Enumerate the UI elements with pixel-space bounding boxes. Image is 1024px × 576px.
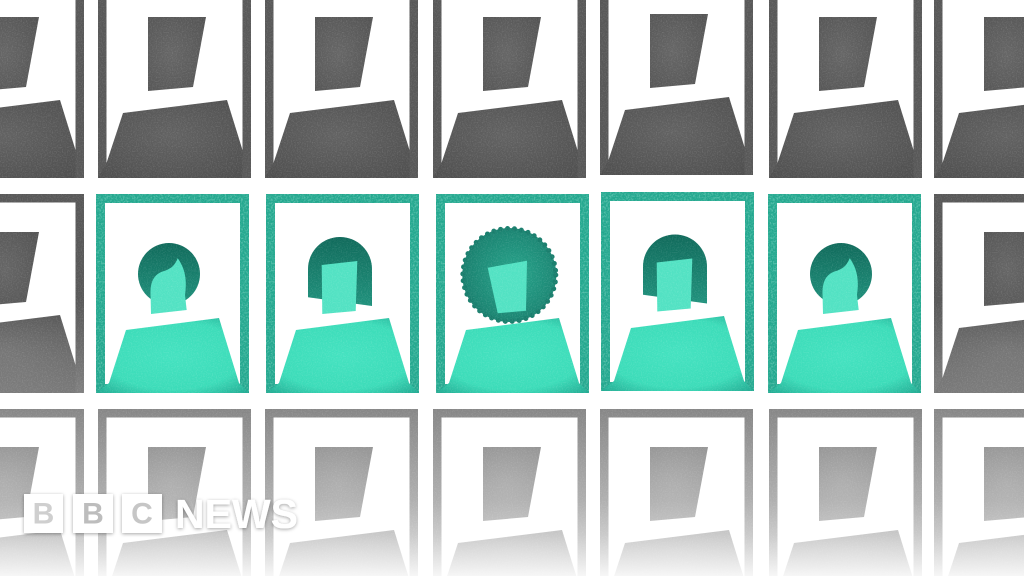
grey card: top row, column 7: [934, 0, 1024, 178]
green card: straight bob, raised: [601, 192, 754, 391]
bottom row of grey portrait cards: [0, 409, 1024, 576]
grey card: bottom row, column 3: [265, 409, 418, 576]
grey card: bottom row, column 2: [98, 409, 251, 576]
top row of grey portrait cards: [0, 0, 1024, 178]
logo block: C: [122, 494, 162, 533]
grey card: top row, column 6: [769, 0, 922, 178]
logo block: B: [73, 494, 113, 533]
BBC News logo: [24, 491, 298, 537]
grey card: bottom row, column 5: [600, 409, 753, 576]
green card: straight bob: [266, 194, 419, 393]
grey card: top row, column 5: [600, 0, 753, 175]
logo block: C: C: [131, 498, 153, 530]
grey card: bottom row, column 7: [934, 409, 1024, 576]
grey card: bottom row, column 1: [0, 409, 84, 576]
logo block: B: B: [82, 498, 104, 530]
grey card: middle row, right edge: [934, 194, 1024, 393]
logo block: B: B: [33, 498, 54, 530]
green portrait cards: [96, 192, 921, 393]
green card: short swept hair, left: [96, 194, 249, 393]
grey card: top row, column 3: [265, 0, 418, 178]
green card: afro hair, centre: [436, 194, 589, 393]
grey card: top row, column 1: [0, 0, 84, 178]
grey card: bottom row, column 4: [433, 409, 586, 576]
grey card: top row, column 2: [98, 0, 251, 178]
logo wordmark: NEWS: NEWS: [175, 491, 298, 537]
middle row grey edge cards: [0, 194, 1024, 393]
green card: short swept hair, right: [768, 194, 921, 393]
logo block: B: [24, 494, 63, 533]
grey card: bottom row, column 6: [769, 409, 922, 576]
grey card: middle row, left edge: [0, 194, 84, 393]
white fade over lower grey cards: [0, 300, 1024, 576]
grey card: top row, column 4: [433, 0, 586, 178]
